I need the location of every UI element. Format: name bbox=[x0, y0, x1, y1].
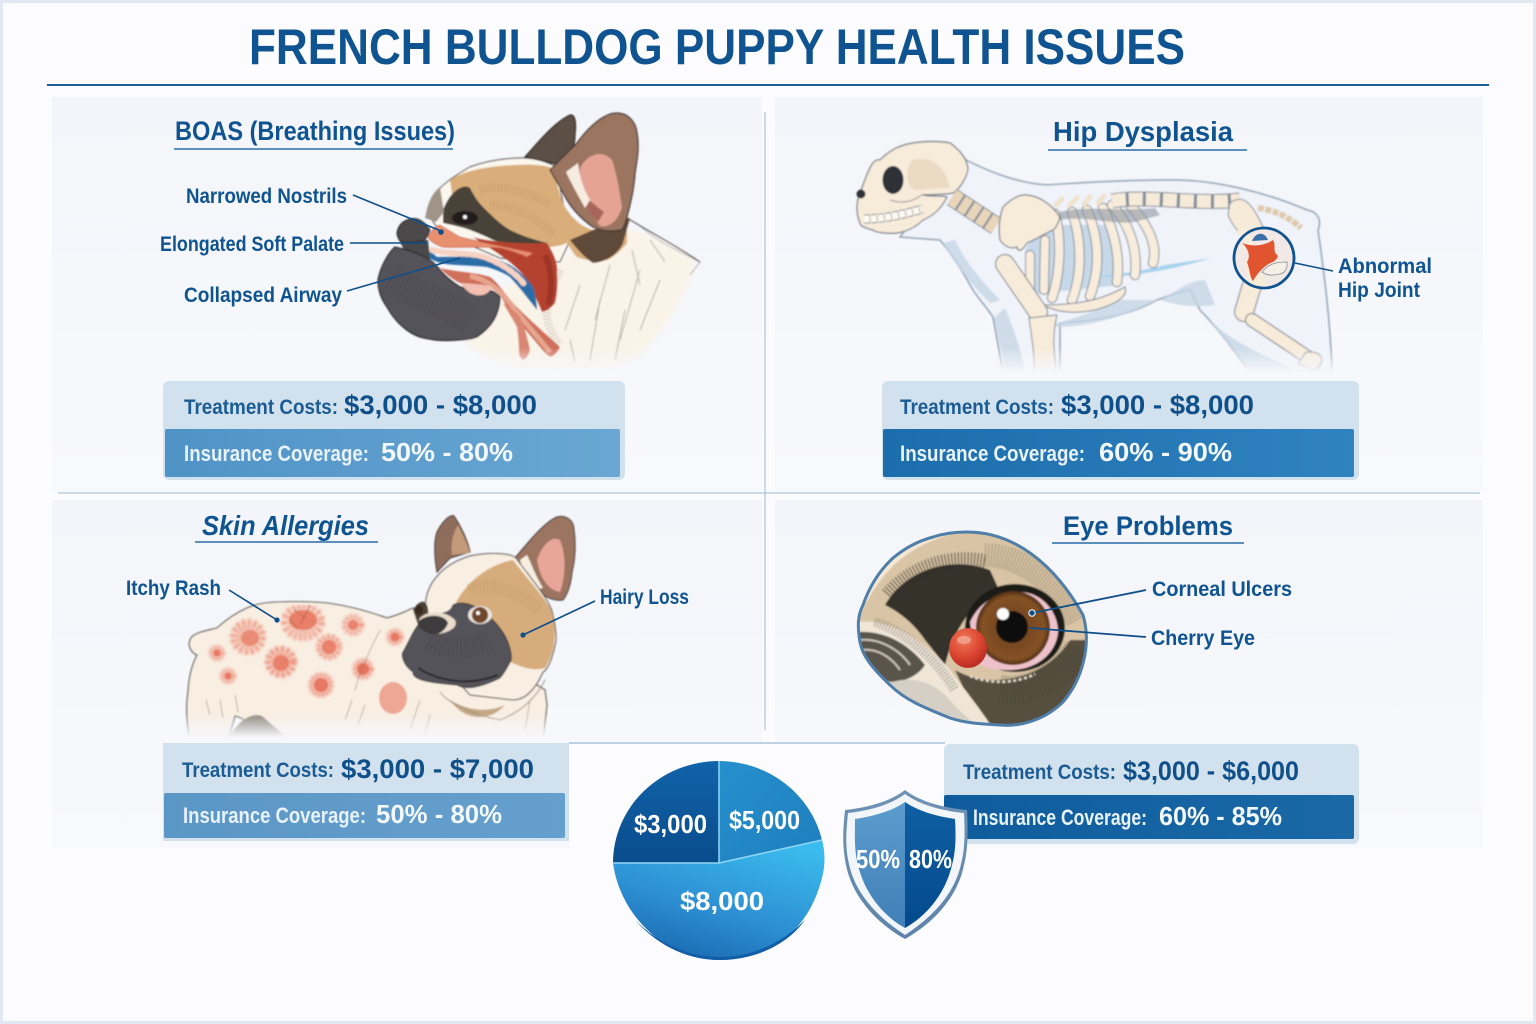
cost card: Skin Allergies: Treatment Costs: bbox=[182, 759, 334, 782]
panel: BOAS bbox=[52, 97, 762, 491]
illustration: bulldog head profile with airway bbox=[378, 113, 700, 372]
cost card: Eye Problems: 60% - 85% bbox=[1159, 801, 1282, 831]
cost card: Skin Allergies bbox=[163, 743, 569, 841]
label: Abnormal Hip Joint: Abnormal bbox=[1338, 255, 1432, 278]
label: Cherry Eye: Cherry Eye bbox=[1151, 627, 1255, 650]
label: Itchy Rash: Itchy Rash bbox=[126, 577, 221, 600]
label: Hairy Loss bbox=[520, 586, 689, 638]
pie label: $3,000: $3,000 bbox=[634, 809, 707, 839]
cost card: BOAS: 50% - 80% bbox=[381, 437, 513, 467]
title: FRENCH BULLDOG PUPPY HEALTH ISSUES bbox=[249, 19, 1185, 75]
label: Itchy Rash bbox=[126, 577, 280, 623]
label: Elongated Soft Palate: Elongated Soft Palate bbox=[160, 233, 344, 256]
illustration: bulldog with rash bbox=[187, 516, 575, 740]
illustration: dog skeleton bbox=[856, 142, 1332, 372]
pie label: $8,000: $8,000 bbox=[680, 886, 764, 916]
cost card: Hip Dysplasia: $3,000 - $8,000 bbox=[1061, 390, 1254, 420]
cost card: Hip Dysplasia: 60% - 90% bbox=[1099, 437, 1232, 467]
cost card: BOAS: Treatment Costs: bbox=[184, 396, 338, 419]
cost card: Hip Dysplasia: Treatment Costs: bbox=[900, 396, 1054, 419]
cost card: Eye Problems: $3,000 - $6,000 bbox=[1123, 756, 1299, 786]
label: Narrowed Nostrils: Narrowed Nostrils bbox=[186, 185, 347, 208]
label: Collapsed Airway: Collapsed Airway bbox=[184, 284, 342, 307]
label: Narrowed Nostrils bbox=[186, 185, 444, 235]
pie chart: treatment cost ranges bbox=[613, 761, 824, 960]
panel: Skin Allergies bbox=[52, 500, 762, 848]
heading: Eye Problems: Eye Problems bbox=[1063, 511, 1233, 541]
label: Hairy Loss: Hairy Loss bbox=[600, 586, 689, 609]
cost card: Skin Allergies: 50% - 80% bbox=[376, 799, 502, 829]
label: Abnormal Hip Joint: Hip Joint bbox=[1338, 279, 1420, 302]
cost card: Hip Dysplasia: Insurance Coverage: bbox=[900, 441, 1085, 466]
shield label: 50%: 50% bbox=[856, 844, 900, 874]
cost card: BOAS: Insurance Coverage: bbox=[184, 441, 369, 466]
cost card: Eye Problems bbox=[944, 744, 1359, 844]
cost card: Skin Allergies: Insurance Coverage: bbox=[183, 803, 366, 828]
icon: abnormal hip joint bbox=[1234, 228, 1294, 290]
cost card: BOAS bbox=[163, 381, 625, 480]
shield: insurance coverage range bbox=[843, 790, 968, 939]
label: Cherry Eye bbox=[1030, 627, 1255, 650]
label: Collapsed Airway bbox=[184, 258, 460, 307]
cost card: Eye Problems: Treatment Costs: bbox=[963, 761, 1116, 784]
label: Abnormal Hip Joint bbox=[1295, 255, 1432, 302]
heading: Skin Allergies: Skin Allergies bbox=[202, 510, 369, 541]
cost card: BOAS: $3,000 - $8,000 bbox=[344, 390, 537, 420]
illustration: eye close-up bbox=[856, 530, 1088, 727]
pie label: $5,000: $5,000 bbox=[729, 805, 800, 835]
cost card: Skin Allergies: $3,000 - $7,000 bbox=[341, 754, 534, 784]
label: Corneal Ulcers: Corneal Ulcers bbox=[1152, 578, 1292, 601]
heading: Hip Dysplasia: Hip Dysplasia bbox=[1053, 116, 1233, 147]
panel: Hip Dysplasia bbox=[775, 97, 1483, 491]
label: Corneal Ulcers bbox=[1029, 578, 1292, 616]
panel: Eye Problems bbox=[775, 500, 1483, 848]
heading: BOAS: BOAS (Breathing Issues) bbox=[175, 116, 455, 146]
shield label: 80%: 80% bbox=[909, 844, 952, 874]
cost card: Eye Problems: Insurance Coverage: bbox=[973, 805, 1147, 830]
cost card: Hip Dysplasia bbox=[882, 381, 1359, 480]
